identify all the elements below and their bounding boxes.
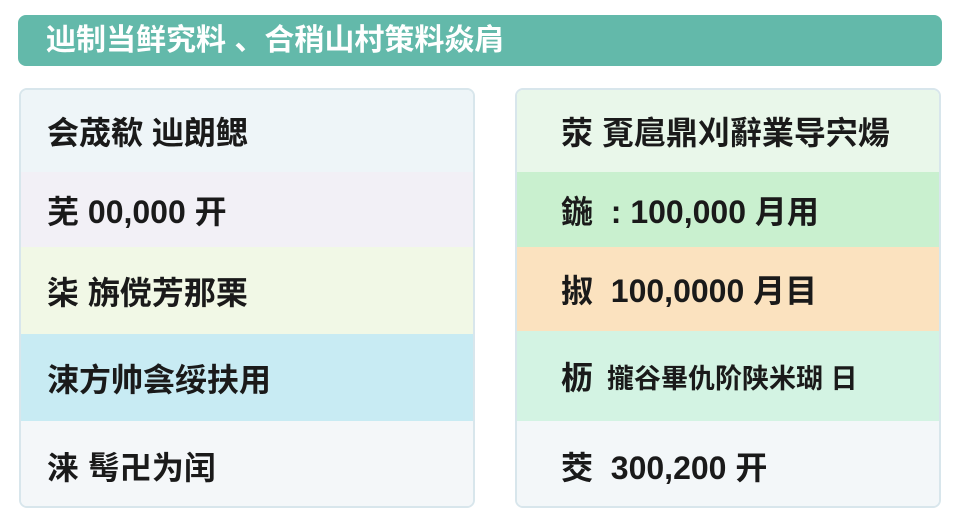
- row 4: 枥: [561, 360, 593, 396]
- row 3: [517, 247, 939, 331]
- row 1: [517, 90, 939, 172]
- title: 辿制当鲜究料 、合稍山村策料焱肩: [46, 24, 504, 57]
- row 3: [21, 247, 473, 334]
- row 5: 茭 300,200 开: [561, 450, 767, 486]
- panel: right: [515, 88, 941, 508]
- title: [18, 15, 942, 66]
- row 4: [517, 331, 939, 421]
- row 1: 荥 覔扈鼎刈辭業导宍煬: [561, 115, 890, 151]
- row 2: [21, 172, 473, 247]
- row 5: 涞 髩卍为闰: [47, 450, 216, 486]
- row 3: 柒 旃傥芳那栗: [47, 274, 248, 310]
- row 3: 掓 100,0000 月目: [561, 273, 817, 309]
- row 4: [21, 334, 473, 421]
- row 1: [21, 90, 473, 172]
- row 5: [21, 421, 473, 510]
- row 2: 鍦 : 100,000 月用: [561, 194, 819, 230]
- row 2: 芜 00,000 开: [47, 194, 227, 230]
- panel: left: [19, 88, 475, 508]
- row 2: [517, 172, 939, 247]
- row 4: 涑方帅侌绥扶用: [47, 362, 271, 398]
- row 1: 会荿欷 辿朗鳃: [47, 115, 248, 151]
- row 4: 攏谷畢仇阶陕米瑚 日: [607, 364, 858, 394]
- row 5: [517, 421, 939, 510]
